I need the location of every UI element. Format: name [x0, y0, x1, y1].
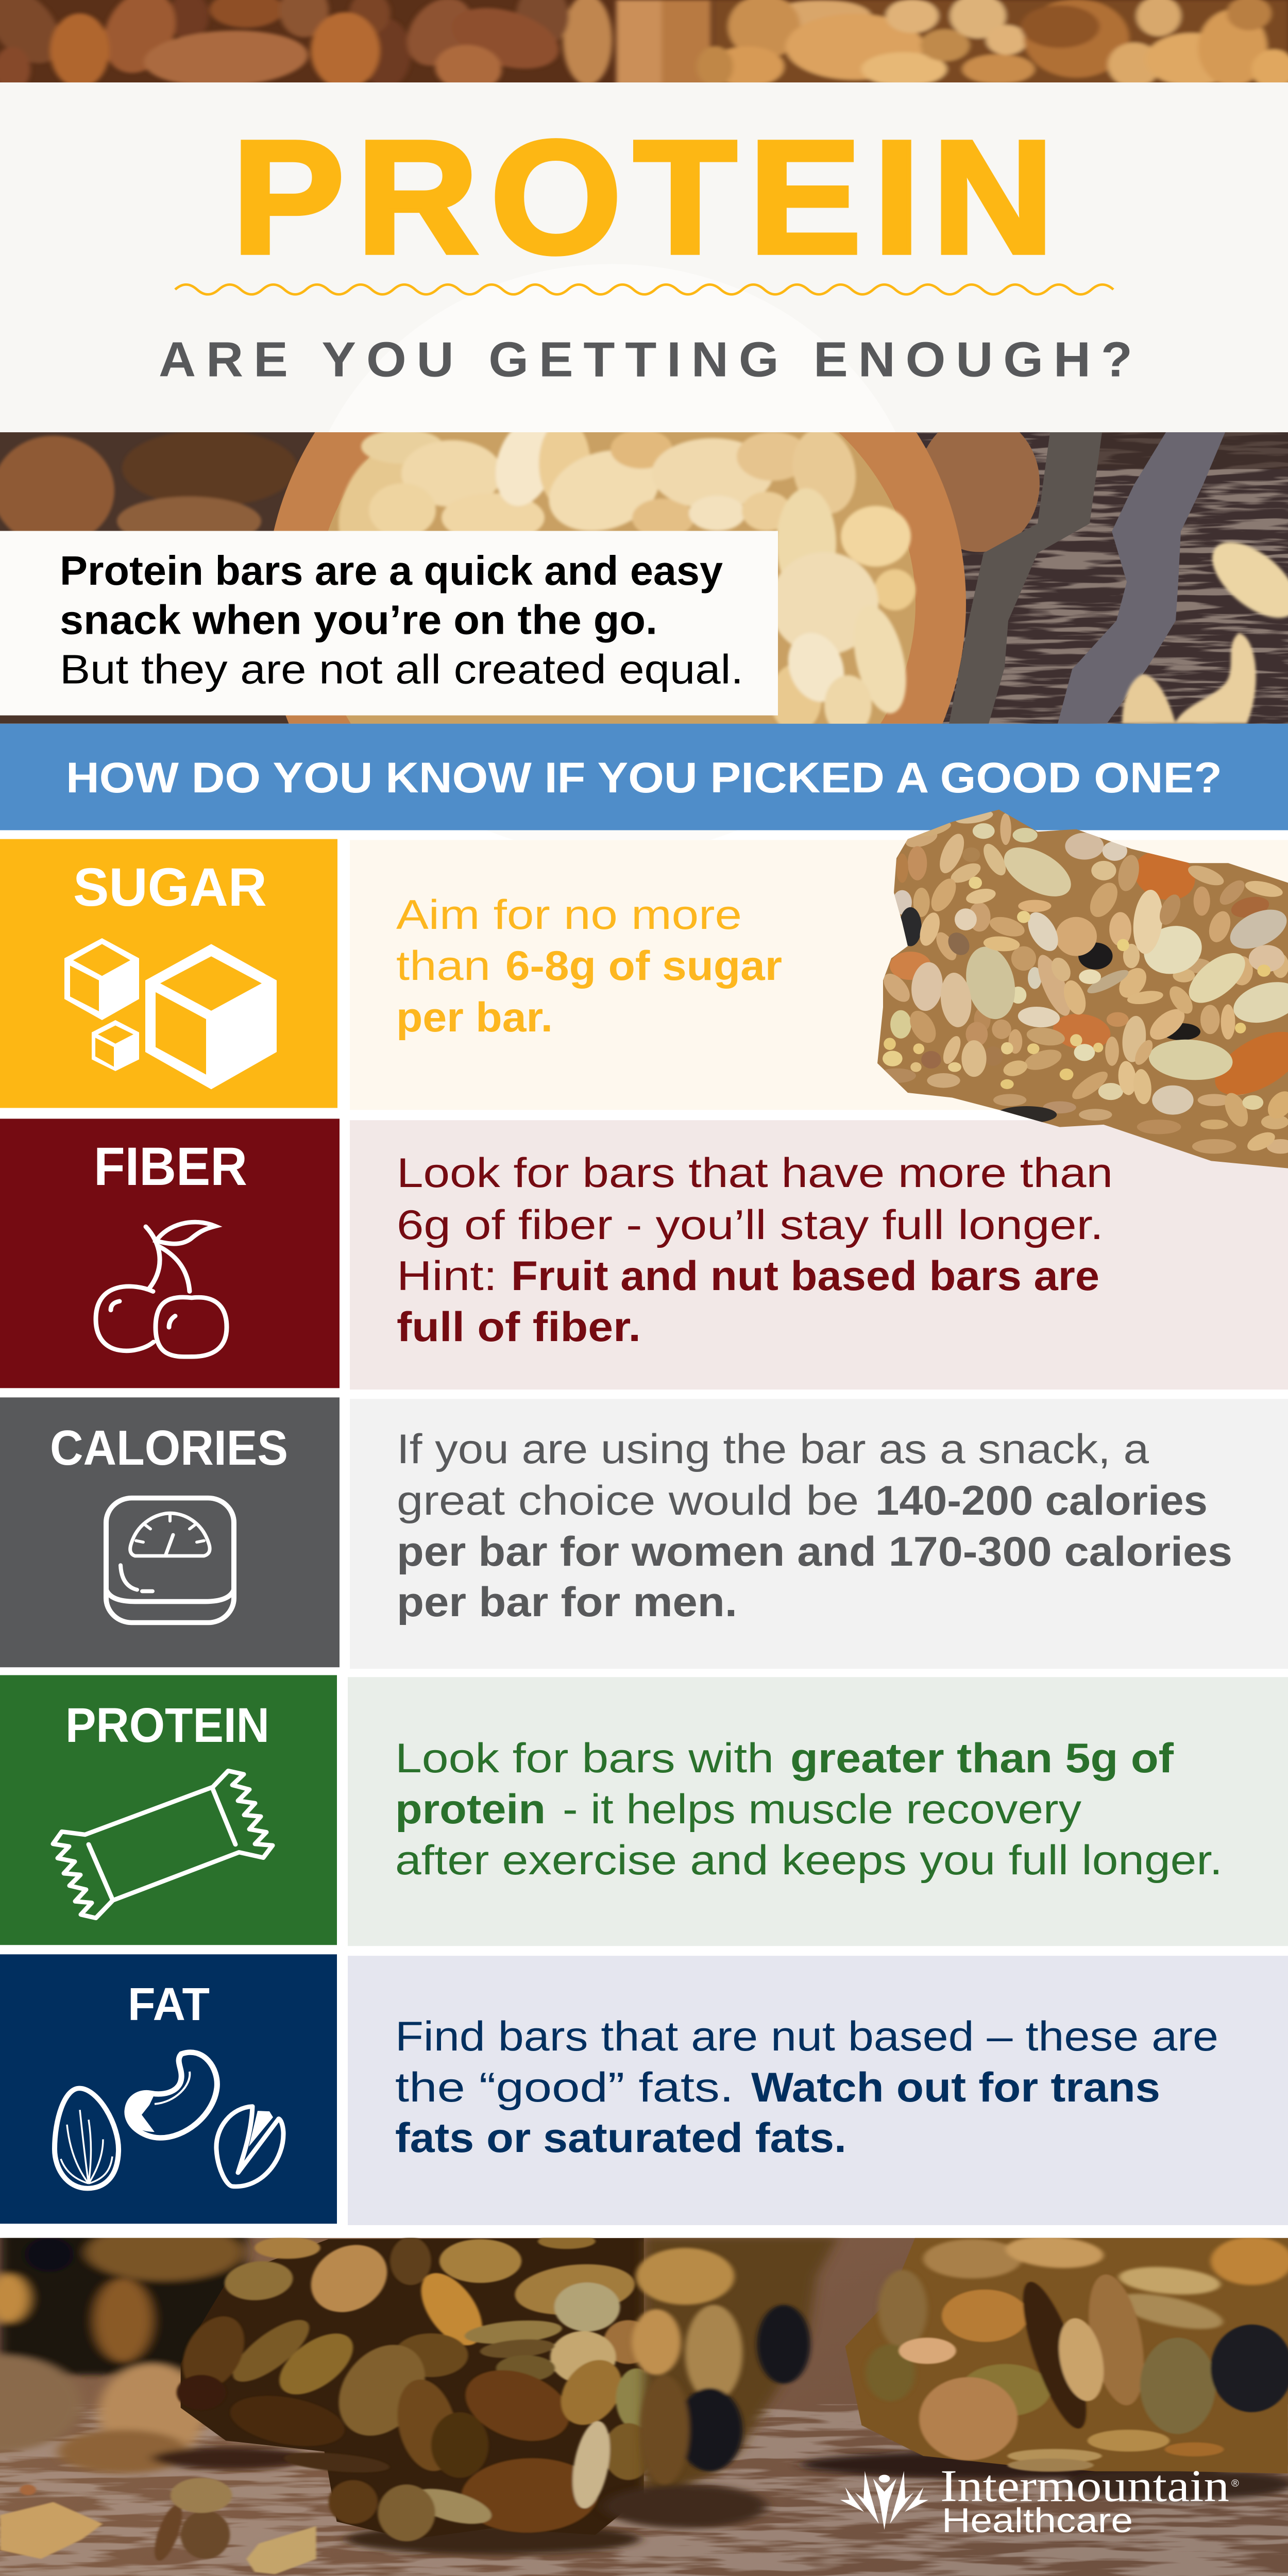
- text: protein: Look for bars with: [395, 1735, 774, 1782]
- label: protein: PROTEIN: [65, 1698, 269, 1752]
- icon: pistachio: [216, 2107, 283, 2187]
- loose cashews: [1122, 528, 1288, 724]
- almond shell: [926, 432, 1040, 552]
- nutcracker: [949, 432, 1225, 724]
- text: sugar: per bar.: [396, 994, 553, 1040]
- text: fiber: Hint:: [397, 1252, 497, 1299]
- icon: cherries: [96, 1222, 227, 1357]
- text: protein: protein: [395, 1786, 546, 1833]
- text: fiber: 6g of fiber - you’ll stay full longer.: [397, 1201, 1104, 1248]
- text: calories: 140-200 calories: [875, 1477, 1208, 1524]
- banner: how do you know: HOW DO YOU KNOW IF YOU PICKED A GOOD ONE?: [66, 754, 1222, 802]
- row: fiber: [0, 1118, 1288, 1389]
- text: fiber: full of fiber.: [397, 1303, 641, 1350]
- logo wordmark: Intermountain: [940, 2461, 1229, 2511]
- wood planks right: [917, 432, 1288, 724]
- icon: wrapped bar: [53, 1771, 273, 1918]
- text: fiber: Fruit and nut based bars are: [511, 1252, 1099, 1299]
- logo mark: [840, 2471, 928, 2530]
- text: sugar: [396, 891, 782, 1040]
- text: fiber: Look for bars that have more than: [397, 1149, 1113, 1196]
- text: sugar: 6-8g of sugar: [505, 942, 782, 989]
- label: calories: CALORIES: [50, 1420, 288, 1475]
- text: fat: Watch out for trans: [751, 2064, 1160, 2111]
- subtitle: ARE YOU GETTING ENOUGH?: [159, 332, 1132, 387]
- text: sugar: Aim for no more: [396, 891, 742, 938]
- text: fat: [395, 2013, 1218, 2161]
- text: protein: greater than 5g of: [790, 1735, 1174, 1782]
- text: fat: the “good” fats.: [395, 2064, 734, 2111]
- text: fat: Find bars that are nut based – these are: [395, 2013, 1218, 2060]
- icon: sugar cubes: [64, 938, 277, 1089]
- text: calories: If you are using the bar as a snack, a: [397, 1426, 1149, 1472]
- left part: [0, 2224, 657, 2574]
- cashews: [337, 432, 917, 724]
- icon: cashew: [127, 2053, 217, 2138]
- text: calories: per bar for women and 170-300 calories: [397, 1528, 1232, 1575]
- text: calories: [397, 1426, 1232, 1625]
- text: fiber: [397, 1149, 1113, 1350]
- text: sugar: than: [396, 942, 490, 989]
- icon: nuts: [55, 2053, 283, 2189]
- wavy divider: [175, 284, 1113, 294]
- photo: granola clusters on wood: [0, 2224, 1288, 2576]
- row: calories: [0, 1397, 1288, 1669]
- bowl: [274, 432, 966, 724]
- text: protein: [395, 1735, 1223, 1884]
- logo: Intermountain Healthcare: ®: [1231, 2478, 1239, 2489]
- intro text box: [0, 531, 778, 716]
- text: protein: - it helps muscle recovery: [563, 1786, 1082, 1833]
- icon: scale: [106, 1498, 234, 1623]
- logo: Intermountain Healthcare: Healthcare: [942, 2502, 1133, 2540]
- intro text box: But they are not all created equal.: [60, 647, 743, 692]
- photo: cashews in wooden bowl: [0, 432, 1288, 724]
- label: sugar: SUGAR: [73, 857, 267, 918]
- text: calories: per bar for men.: [397, 1579, 737, 1625]
- label: fiber: FIBER: [94, 1136, 247, 1196]
- photo: granola bar: [877, 808, 1288, 1168]
- logo: Intermountain Healthcare: [840, 2461, 1239, 2540]
- text: calories: great choice would be: [397, 1477, 859, 1524]
- row: sugar: [0, 839, 1288, 1110]
- label: fat: FAT: [128, 1978, 210, 2030]
- photo: almonds and walnuts: [0, 0, 1288, 82]
- text: protein: after exercise and keeps you full longer.: [395, 1837, 1223, 1884]
- intro text box: snack when you’re on the go.: [60, 597, 657, 643]
- row: fat: [0, 1954, 1288, 2225]
- right part: [603, 2232, 1288, 2528]
- title: PROTEIN: PROTEIN: [232, 107, 1054, 287]
- text: fat: fats or saturated fats.: [395, 2114, 846, 2161]
- banner: how do you know: [0, 724, 1288, 830]
- row: protein: [0, 1675, 1288, 1946]
- walnuts left: [0, 432, 297, 531]
- intro text box: Protein bars are a quick and easy: [60, 548, 723, 594]
- title panel: [0, 82, 1288, 855]
- icon: almond: [55, 2088, 118, 2189]
